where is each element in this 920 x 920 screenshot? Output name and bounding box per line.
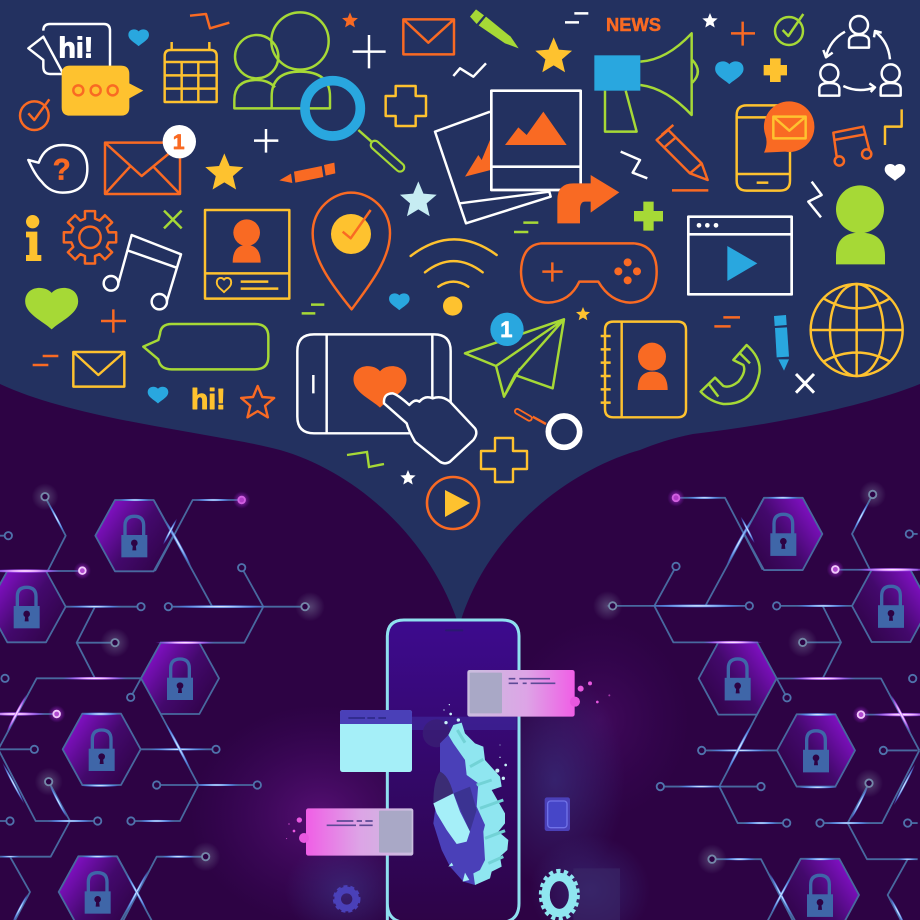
pink dots right [570, 681, 610, 707]
pencil blue [774, 315, 789, 371]
back photo [435, 112, 551, 223]
star orange [342, 12, 358, 27]
mail orange [403, 19, 454, 54]
pencil green [470, 9, 519, 48]
small chip [545, 797, 570, 831]
plus green [634, 202, 663, 231]
plus yellow [764, 58, 787, 82]
message card right [467, 670, 575, 717]
question bubble [28, 145, 87, 193]
large 3D gear [423, 704, 508, 885]
mail yellow [73, 352, 124, 387]
dashes orange [714, 317, 740, 326]
left circuit network with padlock hexagons [0, 483, 325, 920]
navy funnel panel holding the icons [0, 0, 920, 620]
white hi bubble [28, 24, 110, 74]
plus orange [101, 309, 126, 333]
phone frame [387, 620, 519, 920]
magnifier [305, 81, 400, 167]
calendar [165, 42, 217, 102]
star white lower [400, 470, 416, 484]
right circuit network with padlock hexagons [593, 481, 920, 920]
tablet with heart and hand [297, 334, 476, 463]
paper plane: 1 [500, 317, 512, 342]
background glows around phone [190, 620, 690, 920]
x white [796, 374, 814, 393]
heart blue wifi [389, 293, 410, 310]
question bubble: ? [53, 153, 71, 186]
front photo [491, 91, 581, 190]
news label: NEWS [606, 14, 661, 35]
check badge orange [20, 99, 49, 130]
gear orange [64, 211, 116, 263]
heart white [885, 164, 905, 181]
right half icons [435, 9, 905, 447]
green people [234, 12, 330, 108]
speech pill green [143, 324, 268, 369]
heart blue [128, 29, 149, 46]
squiggle green [347, 452, 384, 467]
window card [340, 710, 412, 772]
profile card [205, 210, 289, 299]
wifi [411, 239, 497, 316]
plus white small [254, 129, 278, 153]
plus outline yellow [386, 86, 426, 126]
star yellow tiny [576, 307, 590, 320]
white hi bubble: hi! [58, 32, 93, 64]
location pin [313, 193, 390, 309]
info icon [26, 215, 41, 261]
heart blue small [148, 387, 168, 403]
community cycle [819, 16, 901, 96]
smartphone illustration [286, 620, 620, 920]
soft band inside phone [390, 717, 517, 730]
small gear bottom right [542, 872, 577, 918]
star white [702, 13, 718, 27]
mail with badge: 1 [173, 130, 185, 154]
play button [427, 477, 479, 529]
mail with badge [105, 125, 196, 194]
plus white [353, 35, 386, 68]
step squiggle yellow [885, 109, 902, 145]
message card left [306, 808, 413, 856]
dashes green [514, 223, 538, 232]
crayon orange [279, 163, 335, 183]
arrow orange [557, 175, 619, 223]
white ring magnifier [517, 411, 580, 447]
music note orange [833, 127, 871, 166]
pencil outline orange [657, 125, 708, 190]
paper plane [465, 313, 564, 397]
heart green [25, 288, 78, 329]
heart blue [715, 61, 744, 84]
star outline orange [241, 386, 274, 417]
person green [836, 185, 885, 264]
globe [811, 284, 903, 376]
star yellow [205, 153, 243, 190]
hi yellow text: hi! [191, 384, 226, 416]
squiggle white small [621, 152, 647, 178]
phone speaker [445, 629, 463, 631]
zigzag white [808, 182, 822, 217]
pink dots left [286, 817, 309, 843]
yellow chat bubble [62, 66, 143, 116]
star yellow [535, 37, 572, 72]
game controller [521, 243, 657, 303]
video browser [688, 217, 792, 294]
x green [164, 211, 182, 228]
squiggle orange [190, 14, 229, 28]
music note white [104, 235, 181, 309]
plus outline yellow lower [481, 438, 527, 482]
plus orange [731, 22, 755, 46]
left half icons [20, 12, 497, 463]
telephone handset [701, 345, 760, 404]
dashes orange [33, 356, 58, 365]
check green [775, 14, 803, 45]
contact book [601, 322, 686, 417]
soft panel right bottom [573, 868, 620, 920]
squiggle white [453, 63, 486, 77]
small gear bottom left [335, 888, 358, 910]
megaphone [594, 33, 698, 132]
star pale [400, 181, 437, 216]
dashes green [302, 305, 324, 313]
phone with mail bubble [737, 101, 814, 191]
dashes white [565, 13, 588, 22]
